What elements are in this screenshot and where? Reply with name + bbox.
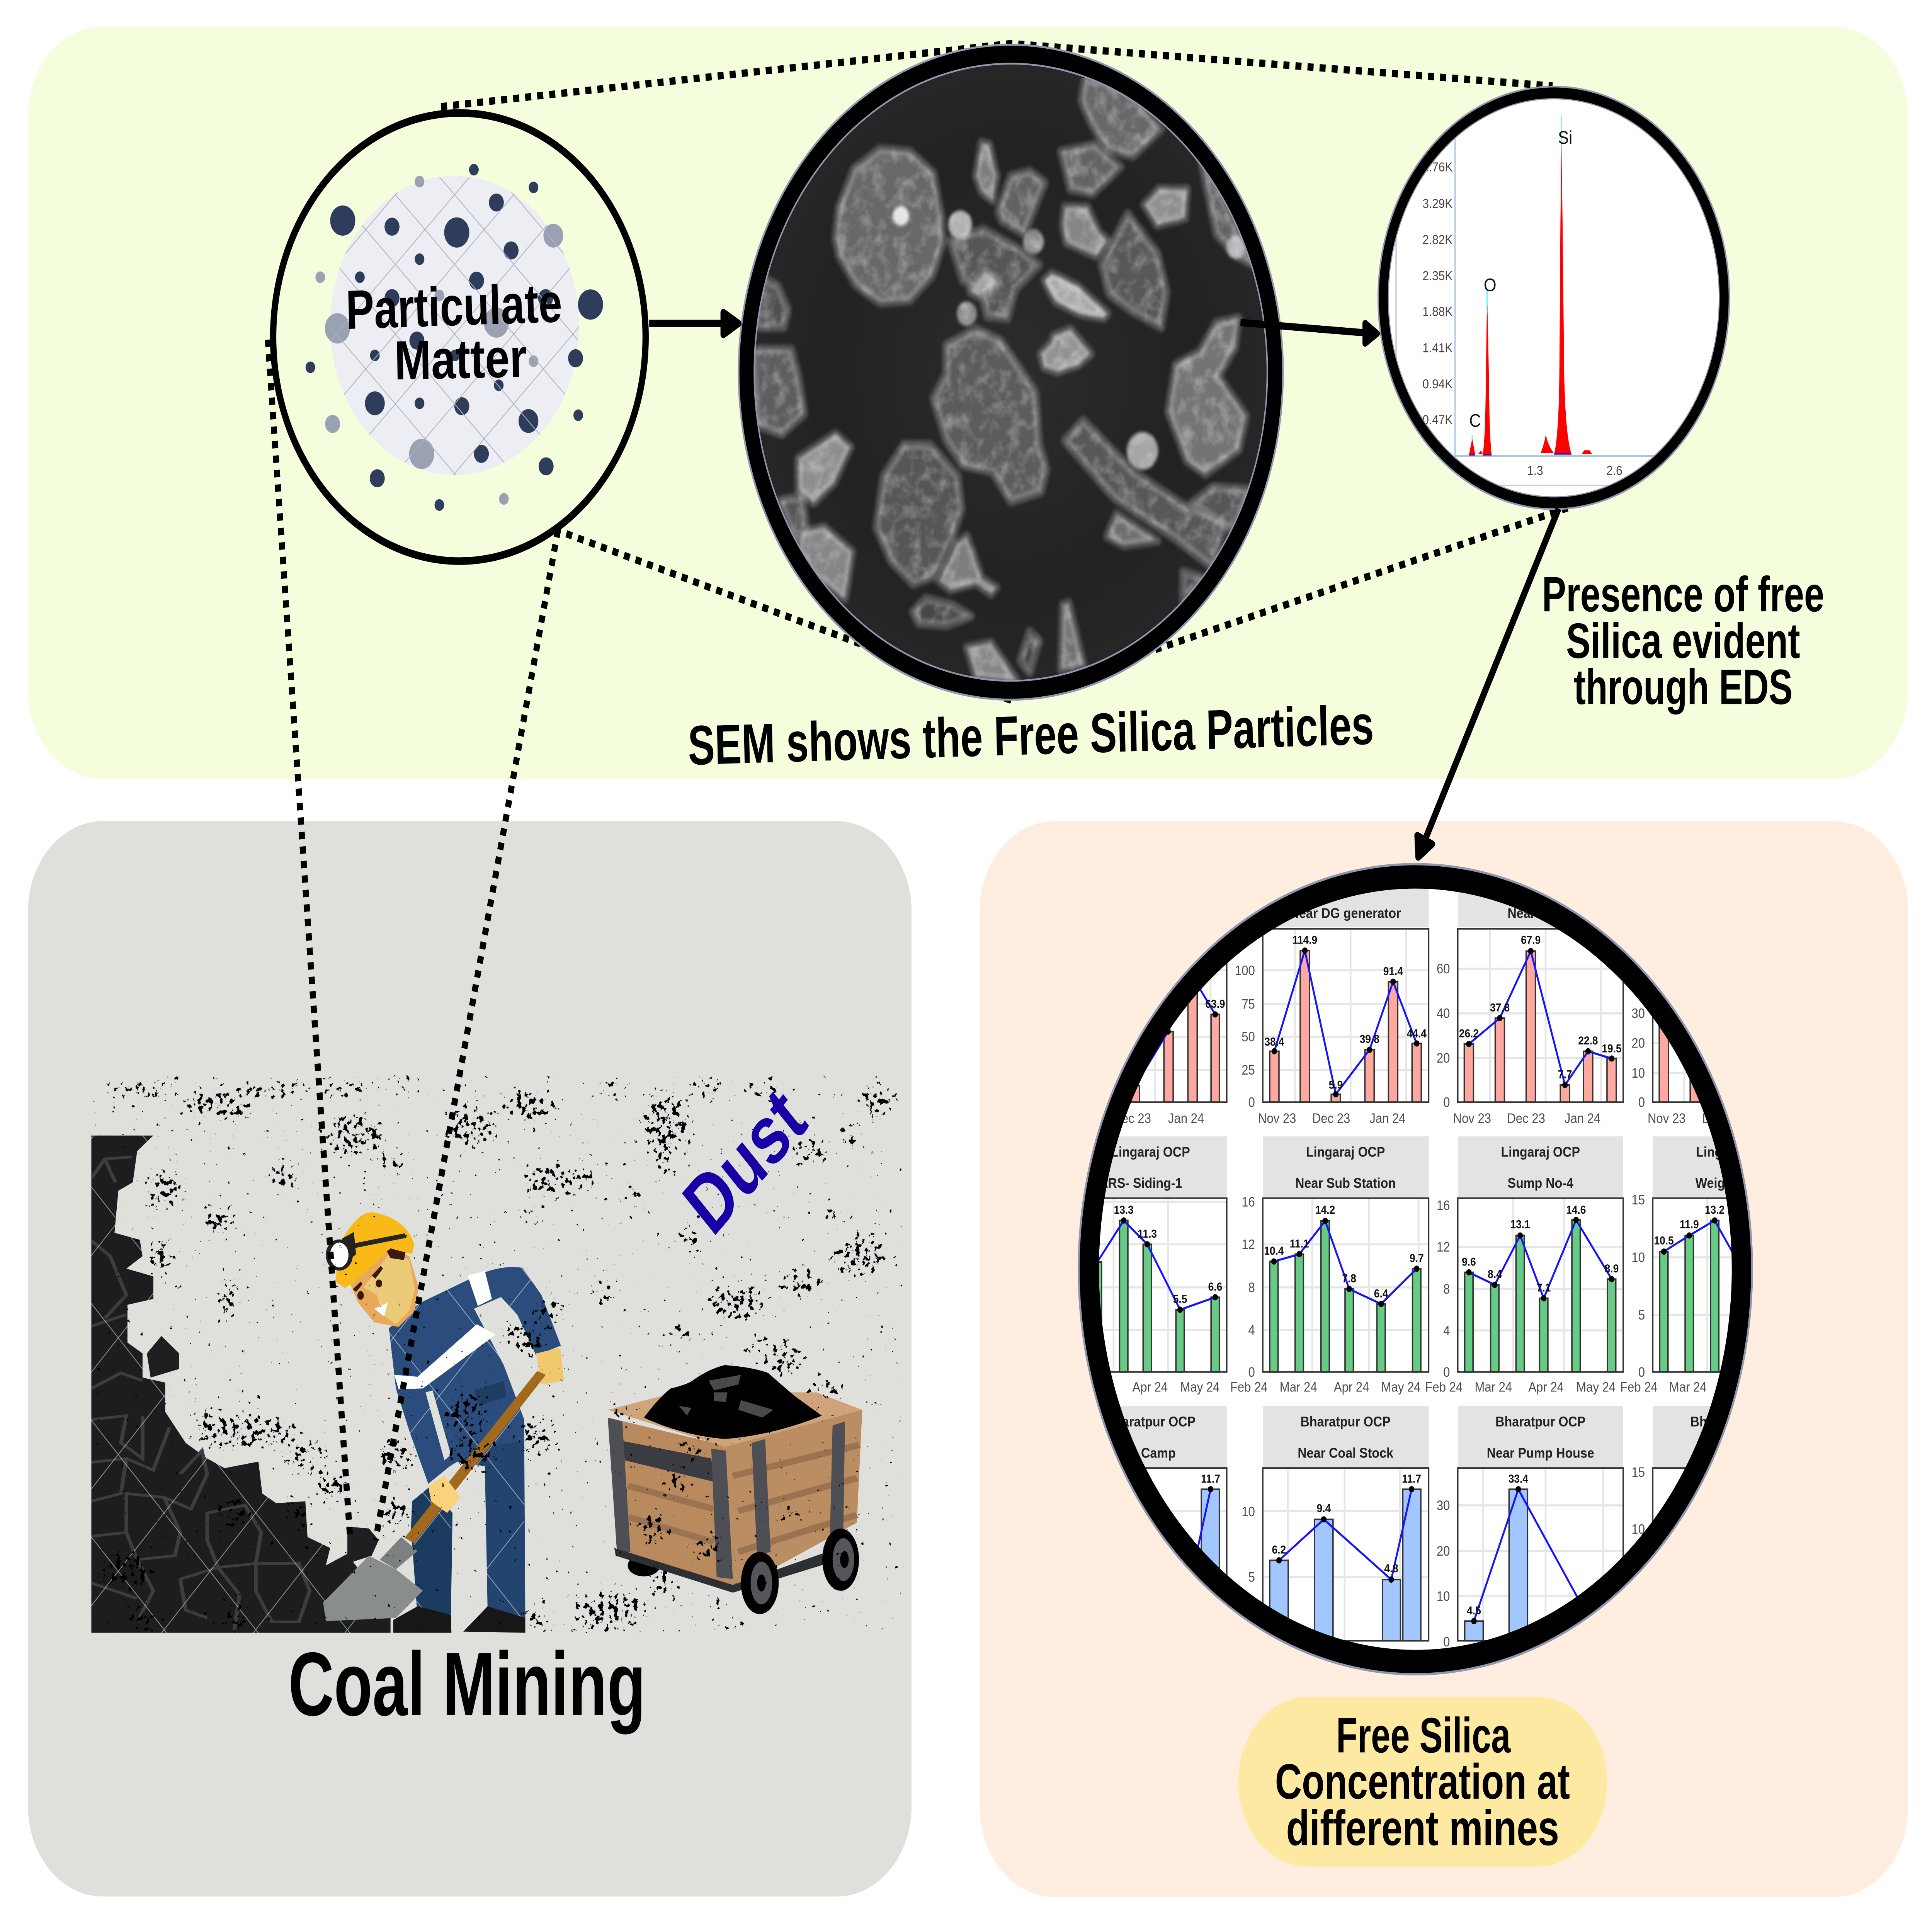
row 2: Lingaraj OCP: 16 <box>1242 1195 1255 1210</box>
row 2: Lingaraj OCP: 6.6 <box>1208 1280 1222 1293</box>
row 1: Nov 23 to Jan 24: Dec 23 <box>1507 1111 1545 1126</box>
chart: EDS spectrum: Si <box>1558 127 1572 148</box>
row 3: Bharatpur OCP: Near Coal Stock <box>1298 1446 1394 1461</box>
label: Particulate Matter: Matter <box>394 327 527 391</box>
row 1: Nov 23 to Jan 24: 37.8 <box>1490 1001 1510 1014</box>
row 3: Bharatpur OCP: 11.7 <box>1201 1472 1220 1485</box>
row 2: Lingaraj OCP: 6.4 <box>1374 1287 1388 1300</box>
heading: Coal Mining: Coal Mining <box>288 1633 646 1735</box>
image: SEM micrograph of particles <box>738 45 1283 700</box>
row 1: Nov 23 to Jan 24: Dec 23 <box>1312 1111 1350 1126</box>
row 2: Lingaraj OCP: 14.6 <box>1566 1204 1586 1216</box>
row 2: Lingaraj OCP: Weigh Bridge <box>1696 1175 1776 1191</box>
row 1: Nov 23 to Jan 24: Dec 23 <box>1702 1111 1740 1126</box>
chart: EDS spectrum: 2.6 <box>1606 463 1622 478</box>
row 3: Bharatpur OCP: Bharatpur OCP <box>1301 1414 1391 1430</box>
row 3: Bharatpur OCP: 30 <box>1437 1498 1450 1513</box>
panel: silica concentration <box>980 821 1908 1897</box>
row 2: Lingaraj OCP: 5 <box>1638 1308 1645 1323</box>
row 3: Bharatpur OCP: 10 <box>1242 1504 1255 1520</box>
coal wall <box>91 1136 391 1633</box>
row 3: Bharatpur OCP: 33.4 <box>1509 1472 1528 1485</box>
row 2: Lingaraj OCP: Apr 24 <box>1334 1380 1369 1395</box>
row 2: Lingaraj OCP: 4 <box>1443 1323 1450 1338</box>
row 1: Nov 23 to Jan 24: 25 <box>1242 1063 1255 1078</box>
row 2: Lingaraj OCP: 7.8 <box>1342 1272 1356 1285</box>
callout: free silica concentration: Concentration at <box>1275 1754 1570 1810</box>
row 1: Nov 23 to Jan 24: Nov 23 <box>1648 1111 1685 1126</box>
row 2: Lingaraj OCP: 9.6 <box>1462 1255 1476 1268</box>
chart: EDS spectrum: 3.29K <box>1422 196 1452 211</box>
row 1: Nov 23 to Jan 24: Jan 24 <box>1168 1111 1204 1126</box>
row 2: Lingaraj OCP: 12 <box>1242 1237 1255 1252</box>
row 2: Lingaraj OCP: 10.5 <box>1654 1234 1674 1247</box>
chart: EDS spectrum: 3.76K <box>1422 160 1452 174</box>
row 2: Lingaraj OCP: 13.2 <box>1705 1204 1725 1216</box>
row 3: Bharatpur OCP <box>1053 1406 1820 1650</box>
row 3: Bharatpur OCP: 4.8 <box>1384 1562 1398 1575</box>
row 3: Bharatpur OCP: 4.5 <box>1467 1604 1481 1617</box>
row 2: Lingaraj OCP: Mar 24 <box>1475 1380 1512 1395</box>
row 2: Lingaraj OCP: 8 <box>1443 1282 1450 1297</box>
row 1: Nov 23 to Jan 24: Near DG generator <box>1290 906 1401 921</box>
row 2: Lingaraj OCP: Mar 24 <box>1669 1380 1707 1395</box>
row 1: Nov 23 to Jan 24: 91.4 <box>1383 965 1403 978</box>
row 1: Nov 23 to Jan 24: 100 <box>1235 963 1255 978</box>
row 1: Nov 23 to Jan 24: 0 <box>1248 1095 1255 1110</box>
chart: EDS spectrum: 0.94K <box>1422 376 1452 391</box>
chart: EDS spectrum: 1.88K <box>1422 304 1452 319</box>
row 2: Lingaraj OCP: Mar 24 <box>1280 1380 1317 1395</box>
row 1: Nov 23 to Jan 24: 22.8 <box>1578 1034 1598 1047</box>
row 3: Bharatpur OCP: 11.7 <box>1402 1472 1421 1485</box>
row 1: Nov 23 to Jan 24: Jan 24 <box>1565 1111 1600 1126</box>
chart: EDS spectrum: 0.47K <box>1422 412 1452 427</box>
row 2: Lingaraj OCP: 15 <box>1631 1192 1645 1208</box>
row 2: Lingaraj OCP: 11.3 <box>1138 1227 1157 1240</box>
row 2: Lingaraj OCP: Feb 24 <box>1425 1380 1463 1395</box>
row 2: Lingaraj OCP: Apr 24 <box>1133 1380 1168 1395</box>
panel: coal mining <box>28 821 912 1896</box>
row 1: Nov 23 to Jan 24: 50 <box>1242 1030 1255 1045</box>
dust speckle <box>102 1080 895 1634</box>
label: Dust: Dust <box>668 1071 820 1252</box>
row 1: Nov 23 to Jan 24: 0 <box>1638 1095 1645 1110</box>
row 2: Lingaraj OCP: 11.1 <box>1290 1237 1309 1250</box>
caption: EDS <box>1542 567 1824 715</box>
row 1: Nov 23 to Jan 24: 60 <box>1437 962 1450 977</box>
row 2: Lingaraj OCP: 8.4 <box>1488 1268 1502 1281</box>
row 1: Nov 23 to Jan 24: Nov 23 <box>1258 1111 1296 1126</box>
row 2: Lingaraj OCP: 8 <box>1248 1280 1255 1295</box>
row 2: Lingaraj OCP: 0 <box>1638 1365 1645 1380</box>
caption: EDS: Presence of free <box>1542 567 1824 622</box>
row 2: Lingaraj OCP: 8.9 <box>1605 1262 1619 1275</box>
row 1: Nov 23 to Jan 24: 20 <box>1631 1036 1645 1051</box>
row 2: Lingaraj OCP: May 24 <box>1381 1380 1421 1395</box>
row 2: Lingaraj OCP: 10.4 <box>1264 1245 1284 1257</box>
chart lens: free silica small multiples <box>1053 864 1820 1674</box>
row 1: Nov 23 to Jan 24: 5.9 <box>1329 1078 1343 1091</box>
row 1: Nov 23 to Jan 24: 0 <box>1443 1095 1450 1110</box>
row 2: Lingaraj OCP: 4 <box>1248 1323 1255 1338</box>
row 2: Lingaraj OCP: Lingaraj OCP <box>1696 1145 1775 1160</box>
row 3: Bharatpur OCP: Bharatpur OCP <box>1105 1414 1196 1430</box>
row 1: Nov 23 to Jan 24: 67.9 <box>1521 934 1541 946</box>
row 2: Lingaraj OCP: 10 <box>1631 1250 1645 1265</box>
row 3: Bharatpur OCP: Near Pump House <box>1487 1446 1594 1461</box>
row 3: Bharatpur OCP: 10 <box>1631 1522 1645 1537</box>
panel: particulate and silica analysis <box>28 27 1908 779</box>
row 2: Lingaraj OCP: 9.7 <box>1410 1252 1424 1264</box>
row 2: Lingaraj OCP: 5.5 <box>1173 1293 1187 1305</box>
chart: EDS spectrum: 2.82K <box>1422 232 1452 247</box>
row 2: Lingaraj OCP: Apr 24 <box>1528 1380 1564 1395</box>
row 1: Nov 23 to Jan 24: 40 <box>1437 1006 1450 1021</box>
scene: miner shovelling coal <box>91 1080 895 1634</box>
row 1: Nov 23 to Jan 24: 26.2 <box>1459 1027 1479 1040</box>
chart: EDS spectrum: O <box>1484 274 1497 295</box>
row 2: Lingaraj OCP: 16 <box>1437 1198 1450 1213</box>
row 3: Bharatpur OCP: Near Office <box>1702 1446 1769 1461</box>
row 1: Nov 23 to Jan 24: 20 <box>1437 1051 1450 1066</box>
label: Particulate Matter <box>345 272 563 391</box>
icon: particulate matter circle <box>273 113 646 561</box>
row 2: Lingaraj OCP: Lingaraj OCP <box>1111 1145 1190 1160</box>
row 3: Bharatpur OCP: 15 <box>1631 1465 1645 1480</box>
row 2: Lingaraj OCP: Feb 24 <box>1230 1380 1268 1395</box>
row 3: Bharatpur OCP: 6.2 <box>1272 1543 1286 1556</box>
row 2: Lingaraj OCP <box>1053 1136 1820 1395</box>
row 3: Bharatpur OCP: 5 <box>1248 1570 1255 1585</box>
arrow: EDS to concentration charts <box>1417 509 1559 857</box>
label: Particulate Matter: Particulate <box>345 272 563 341</box>
row 2: Lingaraj OCP: Feb 24 <box>1620 1380 1658 1395</box>
row 2: Lingaraj OCP: May 24 <box>1180 1380 1219 1395</box>
row 3: Bharatpur OCP: Camp <box>1141 1446 1176 1461</box>
row 1: Nov 23 to Jan 24: 10 <box>1631 1066 1645 1081</box>
row 1: Nov 23 to Jan 24: 44.4 <box>1407 1027 1427 1040</box>
row 1: Nov 23 to Jan 24: 7.7 <box>1558 1068 1572 1081</box>
row 3: Bharatpur OCP: 9.4 <box>1317 1502 1331 1515</box>
chart: EDS spectrum <box>1378 87 1730 509</box>
row 2: Lingaraj OCP: Near Sub Station <box>1295 1175 1396 1191</box>
arrow: SEM to EDS <box>1240 323 1377 344</box>
row 3: Bharatpur OCP: Bharatpur OCP <box>1690 1414 1781 1430</box>
row 1: Nov 23 to Jan 24: Jan 24 <box>1369 1111 1406 1126</box>
row 2: Lingaraj OCP: Sump No-4 <box>1508 1175 1573 1191</box>
chart: EDS spectrum: 2.35K <box>1422 268 1452 283</box>
row 2: Lingaraj OCP: 0 <box>1248 1365 1255 1380</box>
row 1: Nov 23 to Jan 24: Nov 23 <box>1453 1111 1491 1126</box>
callout: free silica concentration: different mines <box>1286 1801 1559 1856</box>
chart: EDS spectrum: 1.3 <box>1527 463 1543 478</box>
caption: EDS: Silica evident <box>1566 613 1800 669</box>
ring: EDS lens frame <box>1378 87 1730 509</box>
row 2: Lingaraj OCP: May 24 <box>1576 1380 1616 1395</box>
row 2: Lingaraj OCP: Lingaraj OCP <box>1306 1145 1385 1160</box>
ring: SEM lens frame <box>738 45 1283 700</box>
illustration: coal cart <box>608 1365 862 1614</box>
ring: chart lens frame <box>1079 864 1752 1674</box>
row 2: Lingaraj OCP: 11.9 <box>1680 1218 1699 1231</box>
row 1: Nov 23 to Jan 24: 30 <box>1631 1006 1645 1021</box>
row 3: Bharatpur OCP: 0 <box>1443 1635 1450 1650</box>
row 1: Nov 23 to Jan 24: 19.5 <box>1602 1042 1622 1055</box>
row 1: Nov 23 to Jan 24: 63.9 <box>1205 997 1225 1010</box>
row 1: Nov 23 to Jan 24: 114.9 <box>1293 934 1317 946</box>
row 2: Lingaraj OCP: 0 <box>1443 1365 1450 1380</box>
row 2: Lingaraj OCP: 14.2 <box>1315 1204 1335 1216</box>
row 3: Bharatpur OCP: 20 <box>1437 1544 1450 1559</box>
row 1: Nov 23 to Jan 24 <box>1053 878 1820 1126</box>
callout: free silica concentration: Free Silica <box>1336 1708 1511 1764</box>
dotted zoom lines <box>268 44 1570 1540</box>
illustration: miner <box>323 1212 564 1633</box>
caption: SEM: SEM shows the Free Silica Particles <box>687 694 1374 777</box>
row 1: Nov 23 to Jan 24: 39.8 <box>1360 1033 1379 1046</box>
chart: EDS spectrum: C <box>1469 410 1481 431</box>
row 3: Bharatpur OCP: 10 <box>1437 1589 1450 1604</box>
caption: EDS: through EDS <box>1574 660 1793 715</box>
chart: EDS spectrum: 1.41K <box>1422 340 1452 355</box>
row 2: Lingaraj OCP: 7.1 <box>1537 1281 1551 1294</box>
row 1: Nov 23 to Jan 24: Dec 23 <box>1113 1111 1151 1126</box>
row 3: Bharatpur OCP: Bharatpur OCP <box>1495 1414 1585 1430</box>
row 2: Lingaraj OCP: 13.3 <box>1114 1204 1134 1216</box>
row 2: Lingaraj OCP: 12 <box>1437 1240 1450 1255</box>
row 1: Nov 23 to Jan 24: 75 <box>1242 997 1255 1012</box>
callout: free silica concentration <box>1238 1697 1607 1867</box>
row 2: Lingaraj OCP: 13.1 <box>1510 1218 1530 1231</box>
row 2: Lingaraj OCP: LRS- Siding-1 <box>1100 1175 1182 1191</box>
row 1: Nov 23 to Jan 24: 38.4 <box>1264 1036 1284 1048</box>
row 1: Nov 23 to Jan 24: Near Sump <box>1508 906 1573 921</box>
row 2: Lingaraj OCP: Lingaraj OCP <box>1501 1145 1580 1160</box>
arrow: particulate to SEM <box>649 312 738 335</box>
